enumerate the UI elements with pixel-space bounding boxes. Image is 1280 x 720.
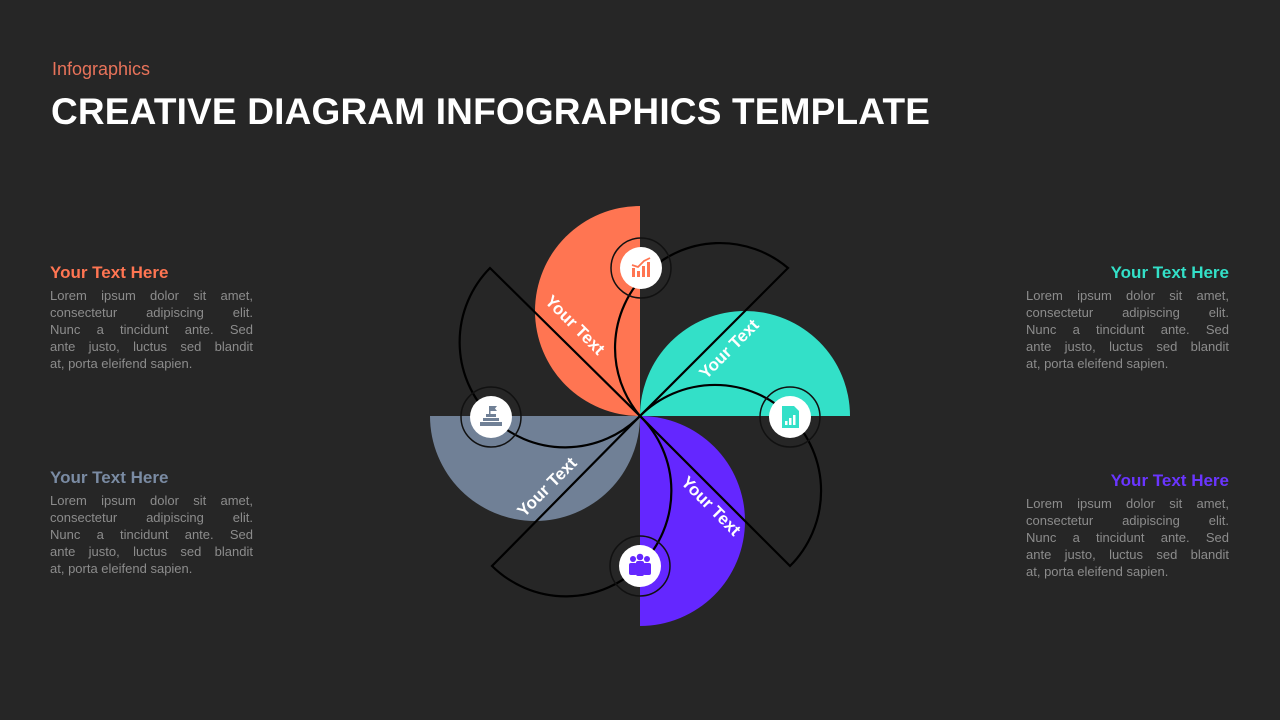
text block: gray: Your Text Here <box>50 468 168 487</box>
icon: team (purple) <box>610 536 670 596</box>
outline shapes <box>460 243 821 596</box>
text block: purple: ante justo, luctus sed blandit <box>1026 547 1229 562</box>
petal: gray <box>430 416 640 521</box>
text block: orange: ante justo, luctus sed blandit <box>50 339 253 354</box>
text block: teal: Nunc a tincidunt ante. Sed <box>1026 322 1229 337</box>
text block: teal: consectetur adipiscing elit. <box>1026 305 1229 320</box>
text block: purple: Nunc a tincidunt ante. Sed <box>1026 530 1229 545</box>
text block: orange <box>50 263 253 371</box>
icon: chart (orange) <box>611 238 671 298</box>
text block: purple <box>1026 471 1229 579</box>
text block: purple: consectetur adipiscing elit. <box>1026 513 1229 528</box>
text block: gray: ante justo, luctus sed blandit <box>50 544 253 559</box>
text block: teal: ante justo, luctus sed blandit <box>1026 339 1229 354</box>
text block: gray: Nunc a tincidunt ante. Sed <box>50 527 253 542</box>
text block: purple: at, porta eleifend sapien. <box>1026 564 1168 579</box>
text block: teal: at, porta eleifend sapien. <box>1026 356 1168 371</box>
text block: orange: consectetur adipiscing elit. <box>50 305 253 320</box>
text block: orange: Nunc a tincidunt ante. Sed <box>50 322 253 337</box>
text block: purple: Your Text Here <box>1111 471 1229 490</box>
text block: purple: Lorem ipsum dolor sit amet, <box>1026 496 1229 511</box>
title: CREATIVE DIAGRAM INFOGRAPHICS TEMPLATE <box>51 91 930 132</box>
icon: podium (gray) <box>461 387 521 447</box>
text block: orange: at, porta eleifend sapien. <box>50 356 192 371</box>
petal labels: Your Text <box>514 453 581 521</box>
petal: orange <box>535 206 640 416</box>
text block: gray: at, porta eleifend sapien. <box>50 561 192 576</box>
petal labels <box>514 292 763 540</box>
text block: teal: Your Text Here <box>1111 263 1229 282</box>
text block: orange: Your Text Here <box>50 263 168 282</box>
text block: teal: Lorem ipsum dolor sit amet, <box>1026 288 1229 303</box>
petal labels: Your Text <box>696 315 763 383</box>
icon: document (teal) <box>760 387 820 447</box>
text block: gray: Lorem ipsum dolor sit amet, <box>50 493 253 508</box>
petal labels: Your Text <box>541 292 609 359</box>
text block: gray <box>50 468 253 576</box>
subtitle: Infographics <box>52 59 150 79</box>
petal: purple <box>640 416 745 626</box>
petal labels: Your Text <box>677 473 745 540</box>
text block: teal <box>1026 263 1229 371</box>
petal: teal <box>640 311 850 416</box>
text block: gray: consectetur adipiscing elit. <box>50 510 253 525</box>
text block: orange: Lorem ipsum dolor sit amet, <box>50 288 253 303</box>
